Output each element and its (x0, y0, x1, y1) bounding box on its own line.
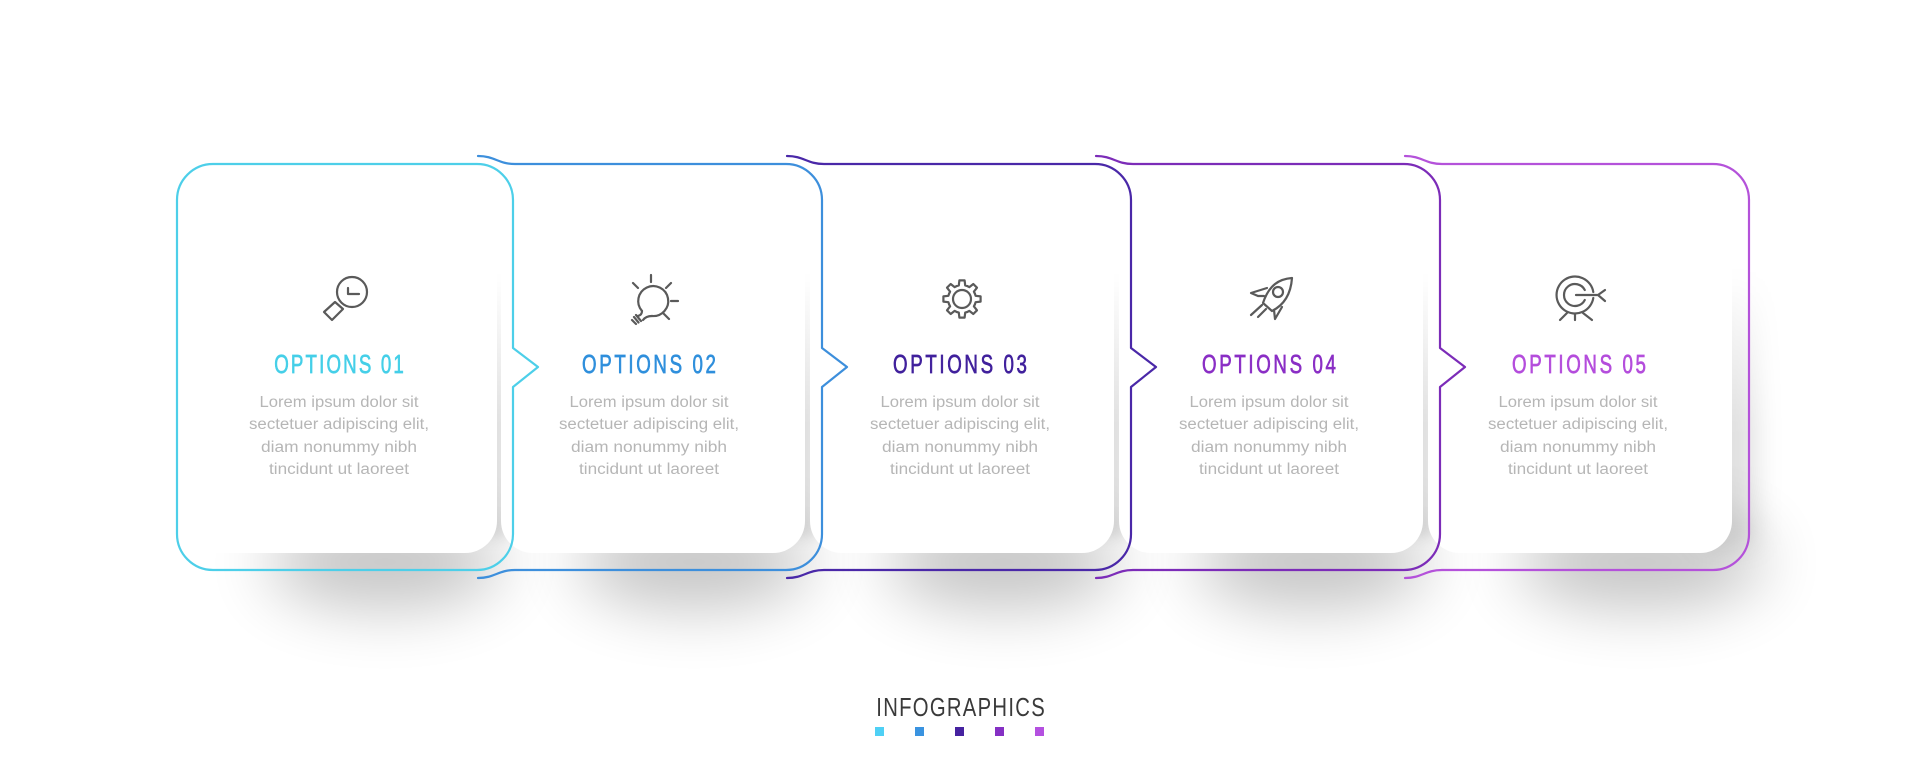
outline: options 05 (1405, 156, 1749, 578)
text: options 02 description: diam nonummy nibh (571, 439, 727, 456)
text: options 03 description: diam nonummy nibh (882, 439, 1038, 456)
icon: rocket (1251, 278, 1292, 319)
text: options 03 description: tincidunt ut laoreet (890, 461, 1031, 478)
legend squares (875, 727, 1044, 736)
text: options 03 description: sectetuer adipiscing elit, (870, 416, 1050, 433)
title: options 01: OPTIONS 01 (274, 349, 404, 379)
title: options 05: OPTIONS 05 (1512, 349, 1646, 379)
text: options 04 description (1179, 394, 1359, 478)
text: options 01 description: Lorem ipsum dolor sit (260, 394, 419, 411)
panel: options 04 (1096, 156, 1465, 578)
text: options 05 description (1488, 394, 1668, 478)
title: options 04: OPTIONS 04 (1202, 349, 1336, 379)
text: options 05 description: tincidunt ut laoreet (1508, 461, 1649, 478)
panel: options 02 (478, 156, 847, 578)
icon: light bulb (632, 275, 678, 324)
panel: options 01 (177, 164, 538, 570)
text: options 02 description: Lorem ipsum dolor sit (570, 394, 729, 411)
outline: options 01 (177, 164, 538, 570)
panel: options 05 (1405, 156, 1749, 578)
outline: options 03 (787, 156, 1156, 578)
text: options 04 description: diam nonummy nibh (1191, 439, 1347, 456)
text: options 02 description: sectetuer adipiscing elit, (559, 416, 739, 433)
icon: target with arrow (1557, 276, 1605, 320)
card drop shadows (267, 275, 1765, 608)
text: options 01 description: tincidunt ut laoreet (269, 461, 410, 478)
text: options 05 description: diam nonummy nibh (1500, 439, 1656, 456)
text: options 02 description: tincidunt ut laoreet (579, 461, 720, 478)
footer title: INFOGRAPHICS (876, 693, 1045, 722)
outline: options 04 (1096, 156, 1465, 578)
text: options 04 description: sectetuer adipiscing elit, (1179, 416, 1359, 433)
text: options 04 description: Lorem ipsum dolor sit (1190, 394, 1349, 411)
text: options 03 description: Lorem ipsum dolor sit (880, 394, 1040, 411)
text: options 04 description: tincidunt ut laoreet (1199, 461, 1340, 478)
text: options 03 description (870, 394, 1050, 478)
text: options 05 description: Lorem ipsum dolor sit (1498, 394, 1658, 411)
title: options 03: OPTIONS 03 (893, 349, 1027, 379)
title: options 02: OPTIONS 02 (582, 349, 716, 379)
icon: gear (943, 280, 981, 318)
icon: magnifier with clock (324, 277, 367, 320)
panel: options 03 (787, 156, 1156, 578)
text: options 02 description (559, 394, 739, 478)
text: options 01 description: diam nonummy nibh (261, 439, 417, 456)
outline: options 02 (478, 156, 847, 578)
text: options 01 description: sectetuer adipiscing elit, (249, 416, 429, 433)
text: options 05 description: sectetuer adipiscing elit, (1488, 416, 1668, 433)
text: options 01 description (249, 394, 429, 478)
